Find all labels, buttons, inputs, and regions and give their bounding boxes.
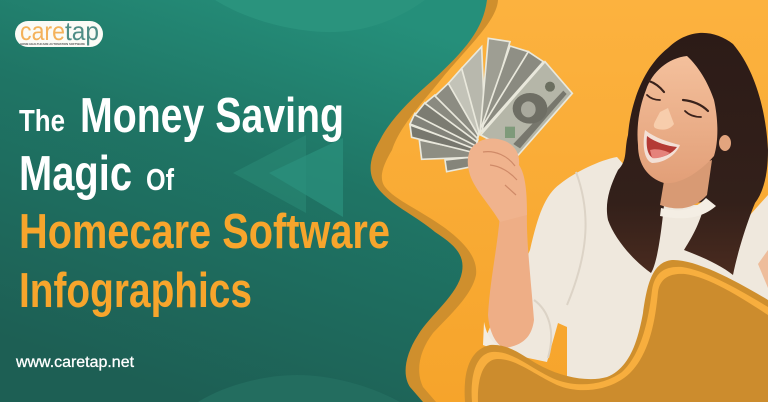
portrait on front bill [513,93,547,124]
title: Magic [19,147,132,201]
face [637,56,717,183]
neck [660,160,712,208]
gold wave band [0,0,498,402]
top lighter ellipse [216,0,340,32]
title [19,89,390,318]
logo: tap [65,16,99,46]
teal panel [0,0,500,402]
seal on front bill [545,82,555,92]
title: Money Saving [80,89,344,143]
logo [15,16,103,47]
forearm [488,210,534,348]
title: Of [146,162,175,197]
sleeve cuff [483,322,500,347]
bottom lighter ellipse [198,375,400,402]
nose shading [654,108,674,130]
logo: care [20,16,65,46]
sleeve seam shading [534,172,586,358]
fan of dollar bills [410,38,572,172]
outer dark edge [465,260,768,402]
logo: HOME HEALTHCARE AUTOMATION SOFTWARE [20,42,85,46]
neckline [660,198,716,218]
far arm skin [758,250,768,288]
denomination on front bill [505,127,515,138]
eyes and brows [647,81,708,117]
sweater [483,157,768,385]
portrait face highlight [521,101,536,117]
title: The [19,103,65,138]
front bill dark edge [513,91,567,148]
website url: www.caretap.net [15,354,135,371]
inner fill [478,274,768,402]
light edge [472,267,768,402]
rewind arrow icon [233,135,343,217]
finger creases [483,152,517,195]
title: Homecare Software [19,205,390,259]
hair back [607,33,768,275]
ear [719,135,731,151]
woman [483,33,768,385]
title: Infographics [19,264,252,318]
mouth [644,130,680,163]
bottom-right wave [465,260,768,402]
hand [468,138,527,222]
